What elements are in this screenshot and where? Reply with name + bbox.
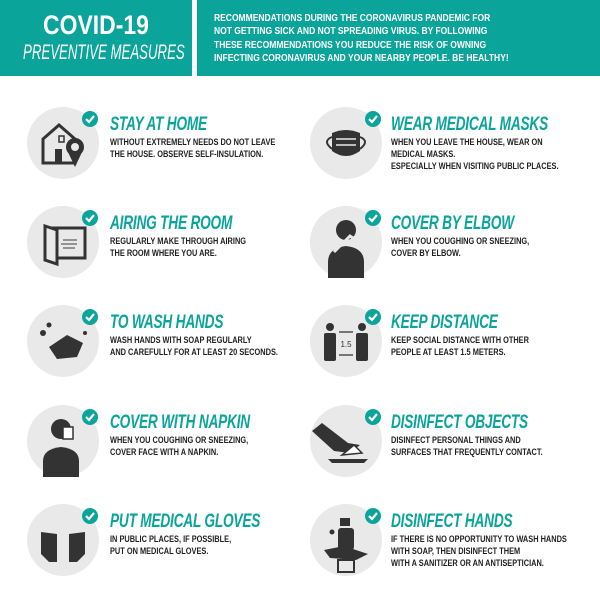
text: MEDICAL MASKS.: [391, 149, 455, 159]
text: [110, 534, 231, 556]
text: PUT ON MEDICAL GLOVES.: [110, 546, 208, 556]
item: stay at home: [27, 107, 275, 179]
heading: COVER WITH NAPKIN: [110, 412, 250, 433]
text: WITH SOAP, THEN DISINFECT THEM: [391, 546, 520, 556]
check: [365, 508, 381, 524]
icon: sanitizer: [310, 504, 382, 576]
text: [391, 137, 559, 171]
text: [391, 236, 529, 258]
text: SURFACES THAT FREQUENTLY CONTACT.: [391, 447, 543, 457]
text: WHEN YOU COUGHING OR SNEEZING,: [391, 236, 529, 246]
text: WHEN YOU COUGHING OR SNEEZING,: [110, 435, 248, 445]
check: [82, 210, 98, 226]
text: WITH A SANITIZER OR AN ANTISEPTICIAN.: [391, 558, 544, 568]
header: intro text box: [197, 0, 600, 76]
check: [365, 210, 381, 226]
heading: AIRING THE ROOM: [110, 213, 232, 234]
text: PEOPLE AT LEAST 1.5 METERS.: [391, 347, 506, 357]
heading: KEEP DISTANCE: [391, 312, 498, 333]
text: THE ROOM WHERE YOU ARE.: [110, 248, 217, 258]
check: [82, 409, 98, 425]
text: [110, 236, 246, 258]
text: [110, 335, 278, 357]
check: [365, 309, 381, 325]
icon: person elbow: [310, 206, 382, 278]
text: ESPECIALLY WHEN VISITING PUBLIC PLACES.: [391, 161, 559, 171]
item: airing the room: [27, 206, 246, 278]
heading: TO WASH HANDS: [110, 312, 223, 333]
icon: hands: [27, 305, 99, 377]
text: DISINFECT PERSONAL THINGS AND: [391, 435, 521, 445]
icon: window: [27, 206, 99, 278]
item: cover with napkin: [27, 405, 250, 477]
text: WITHOUT EXTREMELY NEEDS DO NOT LEAVE: [110, 137, 275, 147]
header: title box: [0, 0, 192, 76]
item: medical masks: [310, 107, 559, 179]
icon: house: [27, 107, 99, 179]
check: [82, 309, 98, 325]
text: AND CAREFULLY FOR AT LEAST 20 SECONDS.: [110, 347, 278, 357]
text: [110, 137, 275, 159]
text: COVER BY ELBOW.: [391, 248, 461, 258]
icon: mask: [310, 107, 382, 179]
item: disinfect hands: [310, 504, 567, 576]
text: IF THERE IS NO OPPORTUNITY TO WASH HANDS: [391, 534, 567, 544]
icon: two people: 1.5: [340, 340, 352, 349]
text: KEEP SOCIAL DISTANCE WITH OTHER: [391, 335, 529, 345]
text: [391, 534, 567, 568]
item: wash hands: [27, 305, 278, 377]
check: [365, 111, 381, 127]
text: REGULARLY MAKE THROUGH AIRING: [110, 236, 246, 246]
item: medical gloves: [27, 504, 260, 576]
heading: DISINFECT OBJECTS: [391, 412, 528, 433]
heading: COVER BY ELBOW: [391, 213, 514, 234]
subtitle: PREVENTIVE MEASURES: [23, 41, 185, 64]
text: WHEN YOU LEAVE THE HOUSE, WEAR ON: [391, 137, 543, 147]
icon: two people: [310, 305, 382, 377]
item: disinfect objects: [310, 405, 543, 477]
text: COVER FACE WITH A NAPKIN.: [110, 447, 218, 457]
heading: DISINFECT HANDS: [391, 511, 512, 532]
check: [82, 508, 98, 524]
text: [110, 435, 248, 457]
text: [391, 435, 543, 457]
title COVID-19: COVID-19: [43, 10, 149, 40]
item: cover by elbow: [310, 206, 529, 278]
heading: PUT MEDICAL GLOVES: [110, 511, 260, 532]
heading: WEAR MEDICAL MASKS: [391, 114, 548, 135]
header: intro text box: INFECTING CORONAVIRUS AND YOUR NEARBY PEOPLE. BE HEALTHY!: [214, 53, 509, 64]
text: THE HOUSE. OBSERVE SELF-INSULATION.: [110, 149, 263, 159]
icon: wiping hand: [310, 405, 382, 477]
header: intro text box: THESE RECOMMENDATIONS YOU REDUCE THE RISK OF OWNING: [214, 40, 486, 51]
text: WASH HANDS WITH SOAP REGULARLY: [110, 335, 252, 345]
check: [365, 409, 381, 425]
item: keep distance: [310, 305, 529, 377]
heading: STAY AT HOME: [110, 114, 207, 135]
icon: gloves: [27, 504, 99, 576]
header: intro text box: NOT GETTING SICK AND NOT SPREADING VIRUS. BY FOLLOWING: [214, 26, 487, 37]
header: intro text box: RECOMMENDATIONS DURING THE CORONAVIRUS PANDEMIC FOR: [214, 13, 490, 24]
text: IN PUBLIC PLACES, IF POSSIBLE,: [110, 534, 231, 544]
check: [82, 111, 98, 127]
icon: person with napkin: [27, 405, 99, 477]
text: [391, 335, 529, 357]
